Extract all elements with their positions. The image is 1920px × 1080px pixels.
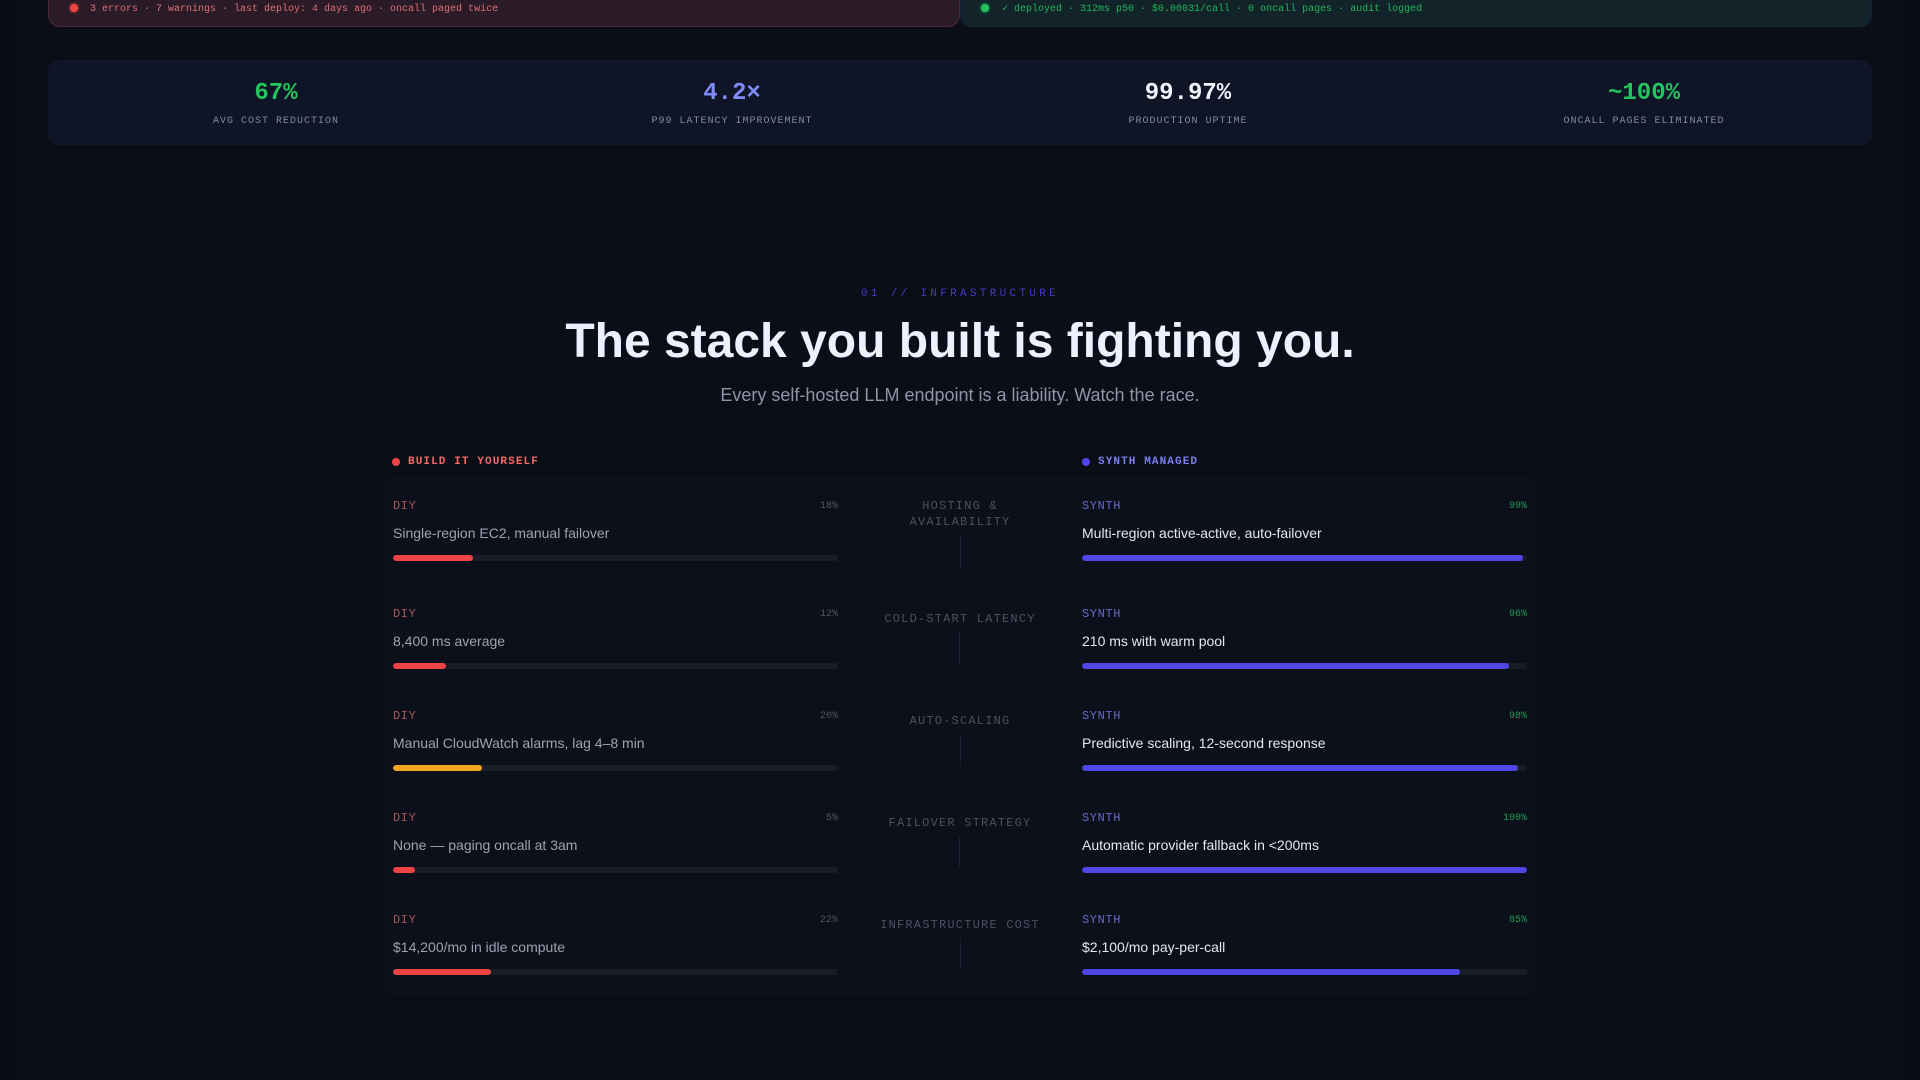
connector: cost <box>960 938 961 970</box>
DIY cell: hosting <box>393 499 838 561</box>
Synth cell: failover: 100% <box>1503 813 1527 824</box>
category label: infrastructure cost: INFRASTRUCTURE COST <box>880 918 1040 932</box>
row: cold-start latency <box>393 607 1527 669</box>
connector: hosting <box>960 536 961 568</box>
panel: summary stats <box>48 60 1872 145</box>
column header: build it yourself <box>392 456 539 468</box>
category label: cold-start latency: COLD-START LATENCY <box>884 612 1036 626</box>
stat: cost reduction: AVG COST REDUCTION <box>213 116 339 127</box>
Synth cell: hosting: SYNTH <box>1082 499 1121 513</box>
DIY cell: cost <box>393 913 838 975</box>
Synth cell: failover: Automatic provider fallback in <200ms <box>1082 837 1319 853</box>
stat: cost reduction: 67% <box>254 80 298 107</box>
category label: hosting and availability: AVAILABILITY <box>910 515 1010 529</box>
Synth cell: latency <box>1082 607 1527 669</box>
category label: hosting and availability <box>910 499 1010 529</box>
DIY cell: latency: 12% <box>820 609 838 620</box>
DIY cell: failover: None — paging oncall at 3am <box>393 837 577 853</box>
Synth cell: scaling: SYNTH <box>1082 709 1121 723</box>
stat: latency improvement: P99 LATENCY IMPROVEMENT <box>651 116 813 127</box>
Synth cell: failover <box>1082 811 1527 873</box>
label: synth managed: SYNTH MANAGED <box>1098 456 1198 468</box>
Synth cell: hosting: 99% <box>1509 501 1527 512</box>
stat: latency improvement <box>651 80 813 127</box>
Synth cell: latency: SYNTH <box>1082 607 1121 621</box>
stat: oncall pages: ONCALL PAGES ELIMINATED <box>1563 116 1725 127</box>
row: hosting and availability <box>393 499 1527 568</box>
stat: latency improvement: 4.2× <box>703 80 761 107</box>
icon: indigo dot <box>1082 458 1090 466</box>
Synth cell: cost: 85% <box>1509 915 1527 926</box>
Synth cell: scaling <box>1082 709 1527 771</box>
panel: Synth status bar <box>960 0 1872 27</box>
Synth cell: scaling: 98% <box>1509 711 1527 722</box>
Synth cell: cost: $2,100/mo pay-per-call <box>1082 939 1225 955</box>
DIY cell: failover: 5% <box>826 813 838 824</box>
icon: red status dot <box>70 4 78 12</box>
section eyebrow: 01 // INFRASTRUCTURE <box>861 288 1059 300</box>
stat: uptime: 99.97% <box>1145 80 1231 107</box>
Synth cell: cost: SYNTH <box>1082 913 1121 927</box>
DIY cell: cost: DIY <box>393 913 416 927</box>
DIY cell: failover <box>393 811 838 873</box>
connector: failover <box>959 836 960 868</box>
Synth cell: failover: SYNTH <box>1082 811 1121 825</box>
row: failover strategy <box>393 811 1527 873</box>
Synth cell: latency: 96% <box>1509 609 1527 620</box>
category label: hosting and availability: HOSTING & <box>922 499 998 513</box>
panel: DIY status bar <box>48 0 960 27</box>
Synth status text: ✓ deployed · 312ms p50 · $0.00031/call · 0 oncall pages · audit logged <box>1002 4 1422 15</box>
DIY cell: scaling: DIY <box>393 709 416 723</box>
heading: The stack you built is fighting you. <box>565 315 1355 368</box>
DIY cell: hosting: Single-region EC2, manual failover <box>393 525 609 541</box>
DIY cell: hosting: DIY <box>393 499 416 513</box>
stat: oncall pages: ~100% <box>1608 80 1680 107</box>
DIY cell: latency: DIY <box>393 607 416 621</box>
stat: uptime: PRODUCTION UPTIME <box>1128 116 1248 127</box>
Synth cell: hosting <box>1082 499 1527 561</box>
row: infrastructure cost <box>393 913 1527 975</box>
DIY cell: latency: 8,400 ms average <box>393 633 505 649</box>
label: build it yourself: BUILD IT YOURSELF <box>408 456 539 468</box>
stat: uptime <box>1128 80 1248 127</box>
Synth cell: scaling: Predictive scaling, 12-second response <box>1082 735 1326 751</box>
DIY cell: scaling <box>393 709 838 771</box>
DIY cell: cost: 22% <box>820 915 838 926</box>
DIY status text: 3 errors · 7 warnings · last deploy: 4 days ago · oncall paged twice <box>90 4 498 15</box>
DIY cell: failover: DIY <box>393 811 416 825</box>
Synth cell: hosting: Multi-region active-active, auto-failover <box>1082 525 1322 541</box>
category label: failover strategy: FAILOVER STRATEGY <box>889 816 1031 830</box>
DIY cell: latency <box>393 607 838 669</box>
Synth cell: latency: 210 ms with warm pool <box>1082 633 1225 649</box>
Synth cell: cost <box>1082 913 1527 975</box>
icon: red dot <box>392 458 400 466</box>
category label: auto-scaling: AUTO-SCALING <box>910 714 1010 728</box>
DIY cell: hosting: 18% <box>820 501 838 512</box>
icon: green status dot <box>981 4 989 12</box>
DIY cell: scaling: 20% <box>820 711 838 722</box>
connector: latency <box>959 632 960 664</box>
DIY cell: scaling: Manual CloudWatch alarms, lag 4–8 min <box>393 735 645 751</box>
DIY cell: cost: $14,200/mo in idle compute <box>393 939 565 955</box>
stat: cost reduction <box>213 80 339 127</box>
stat: oncall pages <box>1563 80 1725 127</box>
connector: scaling <box>960 734 961 766</box>
subtitle: Every self-hosted LLM endpoint is a liability. Watch the race. <box>720 385 1200 405</box>
row: auto-scaling <box>393 709 1527 771</box>
panel: comparison table <box>385 478 1535 994</box>
column header: synth managed <box>1082 456 1198 468</box>
